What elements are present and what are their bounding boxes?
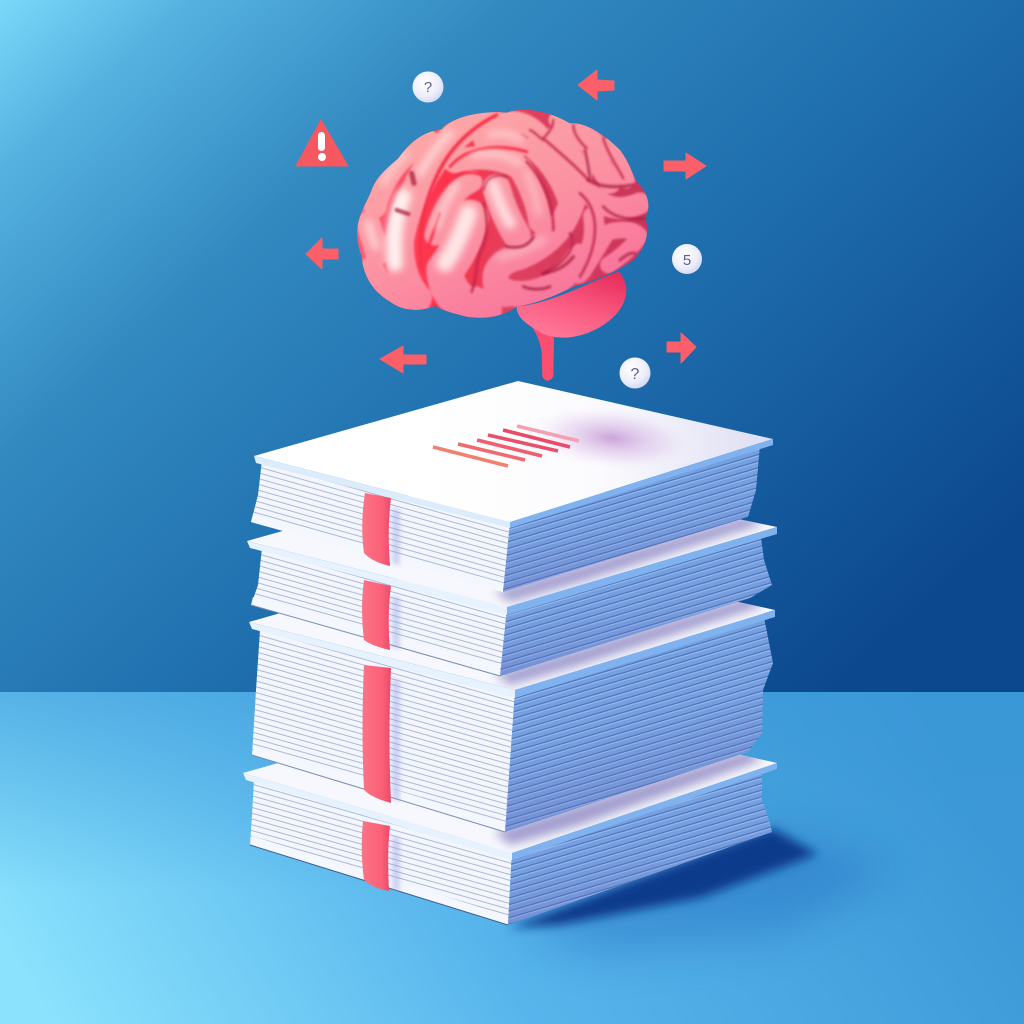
question badge lower: ? [631, 366, 640, 383]
cerebrum [357, 110, 648, 318]
arrow: left-pointing mid left [306, 238, 338, 269]
book 1 (top) [251, 381, 773, 592]
ribbon on book 2 [362, 580, 391, 650]
brain [340, 90, 670, 381]
brain stem [532, 327, 554, 381]
shadow on book 2 cover [495, 515, 762, 602]
question badge top [412, 72, 444, 102]
question badge top: ? [424, 79, 432, 96]
shadow on book 4 cover [495, 750, 762, 845]
background wall [0, 0, 1024, 692]
book 4 (bottom) [243, 700, 777, 925]
shadow on book 3 cover [495, 596, 762, 685]
arrow: right-pointing upper right [664, 153, 706, 179]
floor [0, 692, 1024, 1024]
bright red sulci [421, 115, 527, 267]
floor shadow [508, 825, 900, 955]
warning triangle icon [296, 120, 348, 166]
book 3 [249, 579, 775, 832]
cover glow [519, 395, 705, 481]
cover edge right [510, 439, 773, 528]
cover edge left [254, 456, 510, 528]
dark crevices [397, 150, 645, 289]
arrow: right-pointing lower right [667, 333, 696, 363]
arrow: left-pointing lower left [380, 346, 426, 373]
number badge right [672, 244, 702, 274]
gyri highlights [368, 133, 543, 263]
question badge lower [620, 358, 650, 388]
cover title lines [433, 426, 579, 466]
number badge right: 5 [683, 252, 691, 269]
arrow: upper left-pointing [578, 70, 614, 100]
ribbon on book 3 [362, 665, 391, 803]
ribbon on book 4 [362, 821, 390, 891]
dark sulci [472, 120, 623, 292]
cerebellum [517, 272, 626, 338]
book 2 [247, 492, 777, 676]
gyri folds [368, 116, 640, 310]
top cover [254, 381, 773, 522]
ribbon on book 1 [362, 493, 391, 566]
